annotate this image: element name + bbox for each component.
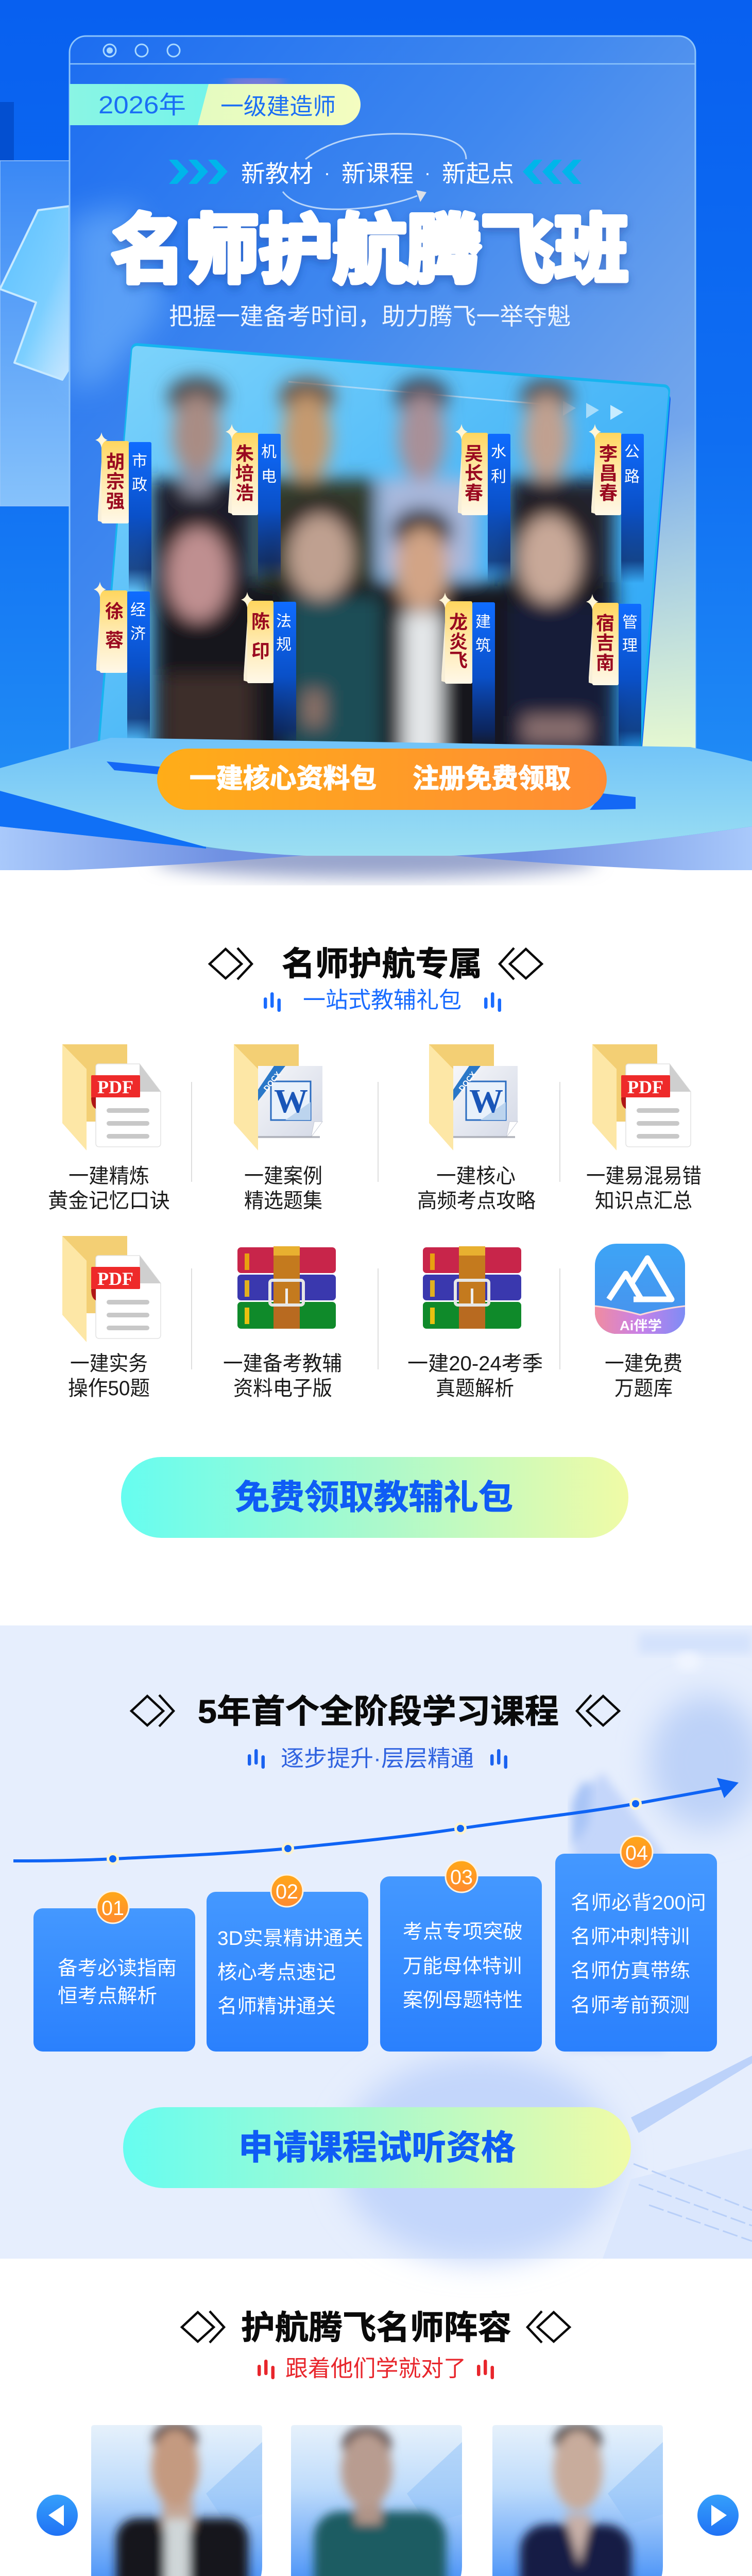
name tag: 宿吉南: 吉 — [596, 632, 614, 653]
name tag: 朱培浩: 培 — [235, 463, 254, 484]
name tag: 吴长春: 吴 — [465, 443, 483, 464]
item: 一建实务 操作50题: 一建实务 — [70, 1352, 148, 1375]
item: 一建20-24考季 真题解析 — [407, 1246, 543, 1400]
name tag: 朱培浩: 电 — [261, 468, 277, 485]
name tag: 李昌春: 春 — [599, 482, 618, 503]
item: 一建案例 精选题集: 精选题集 — [244, 1190, 322, 1212]
divider lines — [192, 1082, 560, 1369]
stage card 01: 恒考点解析 — [58, 1986, 157, 2007]
cta: 一建核心资料包 注册免费领取: 一建核心资料包 — [190, 764, 377, 794]
slogan with chevrons: 新课程 — [341, 160, 414, 187]
name tag: 胡宗强: 胡 — [106, 451, 125, 472]
item: 一建案例 精选题集: DOCX — [262, 1070, 283, 1093]
browser window panel — [70, 36, 695, 788]
subtitle: 把握一建备考时间，助力腾飞一举夺魁 — [169, 303, 571, 330]
stage card 02: 3D实景精讲通关 — [217, 1928, 363, 1950]
item: 一建核心 高频考点攻略 — [417, 1044, 536, 1212]
orbit arrows — [283, 134, 466, 209]
name tag: 胡宗强: 政 — [132, 477, 147, 494]
stage card 04: 名师仿真带练 — [571, 1960, 690, 1982]
name tag: 宿吉南 — [586, 594, 641, 753]
name tag: 宿吉南: 管 — [622, 614, 638, 631]
name tag: 吴长春: 春 — [465, 482, 483, 503]
item: 一建备考教辅 资料电子版: 资料电子版 — [233, 1377, 332, 1400]
name tag: 陈印: 法 — [276, 613, 292, 630]
item: 一建实务 操作50题: PDF — [97, 1268, 133, 1289]
cta: 一建核心资料包 注册免费领取: 注册免费领取 — [413, 764, 571, 794]
item: 一建精炼 黄金记忆口诀 — [48, 1044, 170, 1212]
stage card 02: 名师精讲通关 — [217, 1996, 336, 2018]
stage card 03: 案例母题特性 — [403, 1990, 523, 2011]
item: 一建易混易错 知识点汇总: PDF — [627, 1077, 663, 1097]
nav arrow right — [697, 2495, 739, 2536]
name tag: 吴长春: 水 — [491, 444, 506, 461]
subheading: 一站式教辅礼包 — [264, 988, 501, 1013]
name tag: 龙炎飞: 建 — [475, 614, 491, 631]
name tag: 胡宗强: 宗 — [106, 471, 125, 492]
name tag: 徐蓉: 徐 — [105, 601, 124, 622]
name tag: 李昌春: 公 — [624, 444, 640, 461]
stage card 04: 04 — [625, 1842, 648, 1865]
name tag: 徐蓉 — [94, 582, 150, 741]
name tag: 龙炎飞: 筑 — [475, 637, 491, 654]
stage card 02: 02 — [276, 1880, 298, 1903]
subheading: 逐步提升·层层精通: 逐步提升·层层精通 — [281, 1746, 474, 1771]
stage card 03: 03 — [450, 1866, 473, 1889]
name tag: 吴长春 — [455, 424, 510, 583]
heading: 名师护航专属 — [210, 945, 542, 982]
name tag: 徐蓉: 蓉 — [105, 630, 124, 651]
cta: 免费领取教辅礼包: 免费领取教辅礼包 — [235, 1478, 513, 1516]
subheading: 跟着他们学就对了: 跟着他们学就对了 — [285, 2356, 466, 2381]
item: 一建精炼 黄金记忆口诀: PDF — [97, 1077, 133, 1097]
item: 一建易混易错 知识点汇总: 知识点汇总 — [595, 1190, 692, 1212]
heading: 护航腾飞名师阵容 — [182, 2309, 570, 2346]
item: 一建易混易错 知识点汇总 — [586, 1044, 702, 1212]
item: 一建免费 万题库 — [595, 1244, 685, 1400]
item: 一建免费 万题库: Ai伴学 — [620, 1318, 662, 1333]
slogan with chevrons: 新教材 — [241, 160, 313, 187]
stage card 03 — [380, 1860, 542, 2052]
growth curve arrow — [13, 1778, 739, 1865]
slogan with chevrons: 新起点 — [442, 160, 514, 187]
name tag: 胡宗强: 市 — [132, 453, 147, 470]
name tag: 龙炎飞: 飞 — [449, 650, 468, 671]
subheading: 一站式教辅礼包: 一站式教辅礼包 — [303, 988, 462, 1013]
item: 一建免费 万题库: 一建免费 — [605, 1352, 682, 1375]
stage card 04: 名师必背200问 — [571, 1892, 706, 1914]
item: 一建20-24考季 真题解析: 真题解析 — [436, 1377, 514, 1400]
item: 一建免费 万题库: 万题库 — [614, 1377, 673, 1400]
name tag: 吴长春: 长 — [465, 463, 483, 484]
name tag: 龙炎飞: 炎 — [449, 631, 468, 652]
cta: 申请课程试听资格 — [123, 2107, 631, 2188]
stage card 04 — [555, 1836, 717, 2052]
name tag: 李昌春: 昌 — [599, 463, 618, 484]
year tag — [70, 79, 361, 125]
stage card 01: 备考必读指南 — [58, 1958, 177, 1979]
name tag: 宿吉南: 宿 — [596, 613, 614, 634]
year tag: 2026年 — [98, 92, 186, 119]
heading: 护航腾飞名师阵容: 护航腾飞名师阵容 — [241, 2309, 511, 2346]
item: 一建精炼 黄金记忆口诀: 一建精炼 — [69, 1165, 149, 1188]
stage card 02: 核心考点速记 — [217, 1962, 336, 1984]
name tag: 陈印 — [241, 592, 296, 751]
item: 一建备考教辅 资料电子版 — [223, 1246, 342, 1400]
slogan with chevrons: · — [424, 162, 431, 183]
name tag: 胡宗强: 强 — [106, 490, 125, 512]
teacher card: 龙炎飞 — [91, 2422, 262, 2576]
item: 一建20-24考季 真题解析: 一建20-24考季 — [407, 1352, 543, 1375]
name tag: 李昌春: 路 — [624, 468, 640, 485]
stage card 03: 考点专项突破 — [403, 1921, 523, 1943]
name tag: 朱培浩: 机 — [261, 444, 277, 461]
slogan with chevrons — [169, 160, 582, 187]
item: 一建核心 高频考点攻略: 高频考点攻略 — [417, 1190, 536, 1212]
stage card 03: 万能母体特训 — [403, 1956, 522, 1977]
blurred teachers group — [152, 377, 616, 762]
lightning bolt — [0, 206, 70, 380]
teacher group photo frame — [104, 349, 664, 804]
stage card 04: 名师冲刺特训 — [571, 1926, 690, 1948]
name tag: 李昌春 — [589, 424, 644, 583]
name tag: 宿吉南: 理 — [622, 637, 638, 654]
item: 一建实务 操作50题 — [62, 1236, 161, 1400]
hero floor and wave — [0, 738, 752, 870]
item: 一建案例 精选题集: W — [274, 1082, 308, 1120]
name tag: 陈印: 印 — [251, 640, 270, 662]
item: 一建精炼 黄金记忆口诀: 黄金记忆口诀 — [48, 1190, 170, 1212]
cta: 一建核心资料包 注册免费领取 — [157, 749, 607, 810]
name tag: 朱培浩 — [226, 424, 281, 583]
nav arrow left — [37, 2495, 78, 2536]
name tag: 陈印: 陈 — [251, 611, 270, 632]
name tag: 徐蓉: 经 — [130, 602, 146, 619]
stage card 01: 01 — [101, 1897, 124, 1920]
item: 一建易混易错 知识点汇总: 一建易混易错 — [586, 1165, 702, 1188]
name tag: 龙炎飞: 龙 — [449, 612, 468, 633]
stage card 02 — [207, 1875, 368, 2052]
item: 一建核心 高频考点攻略: W — [469, 1082, 503, 1120]
item: 一建案例 精选题集: 一建案例 — [244, 1165, 322, 1188]
stage card 04: 名师考前预测 — [571, 1995, 690, 2016]
item: 一建实务 操作50题: 操作50题 — [68, 1377, 150, 1400]
teacher card: 宿吉南 — [492, 2424, 663, 2576]
section background: learning stages — [0, 1625, 752, 2262]
name tag: 李昌春: 李 — [599, 443, 618, 464]
teacher card: 陈印 — [291, 2425, 462, 2576]
cta: 免费领取教辅礼包 — [121, 1457, 628, 1538]
year tag: 一级建造师 — [220, 93, 336, 120]
stage card 01 — [33, 1891, 195, 2052]
name tag: 宿吉南: 南 — [596, 652, 614, 673]
name tag: 朱培浩: 浩 — [235, 482, 254, 503]
heading: 名师护航专属: 名师护航专属 — [282, 945, 482, 982]
name tag: 朱培浩: 朱 — [235, 443, 254, 464]
heading: 5年首个全阶段学习课程: 5年首个全阶段学习课程 — [198, 1693, 559, 1730]
hero background — [0, 0, 752, 876]
name tag: 徐蓉: 济 — [130, 625, 146, 642]
name tag: 陈印: 规 — [276, 636, 292, 653]
name tag: 吴长春: 利 — [491, 468, 506, 485]
item: 一建核心 高频考点攻略: 一建核心 — [436, 1165, 516, 1188]
title: 名师护航腾飞班 — [111, 208, 628, 292]
name tag: 龙炎飞 — [439, 592, 495, 752]
item: 一建案例 精选题集 — [234, 1044, 322, 1212]
frame overlap over floor — [107, 761, 636, 810]
white section background — [0, 841, 752, 1625]
cta: 申请课程试听资格: 申请课程试听资格 — [238, 2128, 516, 2166]
item: 一建核心 高频考点攻略: DOCX — [457, 1070, 478, 1093]
name tag: 胡宗强 — [95, 432, 151, 591]
slogan with chevrons: · — [324, 162, 330, 183]
item: 一建备考教辅 资料电子版: 一建备考教辅 — [223, 1352, 342, 1375]
